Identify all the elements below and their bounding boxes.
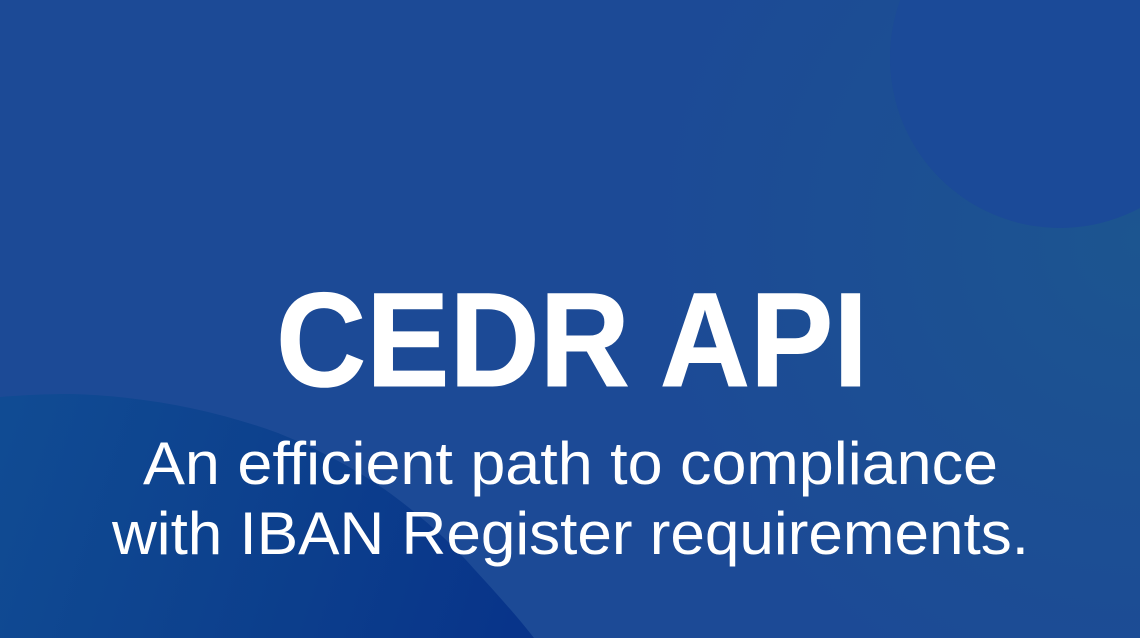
subtitle line 2: with IBAN Register requirements.	[111, 500, 1029, 567]
shape: top-right circle	[890, 0, 1140, 228]
title: CEDR API	[276, 266, 868, 415]
subtitle line 1: An efficient path to compliance	[143, 430, 998, 497]
subtitle	[111, 430, 1029, 567]
shape: bottom-left curve	[0, 394, 534, 638]
